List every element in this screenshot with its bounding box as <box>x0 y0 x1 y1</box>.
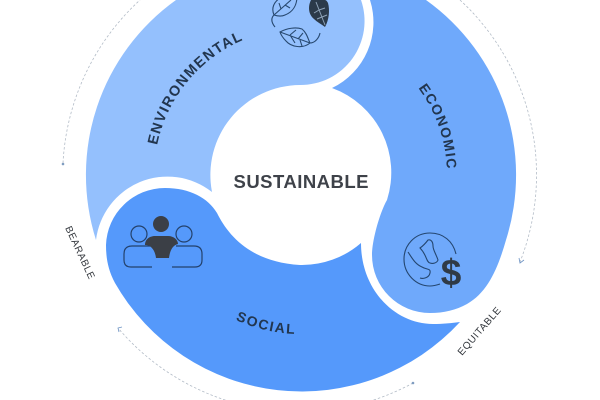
icon: people <box>124 216 202 267</box>
panel: economic segment <box>332 0 516 313</box>
dashed arc: bottom <box>118 327 414 400</box>
label: equitable: EQUITABLE <box>456 305 504 358</box>
heading: social: SOCIAL <box>236 312 294 334</box>
panel: environmental segment <box>86 0 365 240</box>
panel: social segment <box>106 188 460 391</box>
dashed arc: right <box>460 0 537 263</box>
heading: environmental: ENVIRONMENTAL <box>148 33 242 144</box>
label: bearable: BEARABLE <box>62 225 96 281</box>
dashed arc: left <box>62 0 140 165</box>
icon: globe with dollar <box>404 233 462 293</box>
icon: leaves <box>272 0 329 47</box>
dollar sign: $ <box>441 252 462 293</box>
title: sustainable: SUSTAINABLE <box>234 171 368 192</box>
heading: economic: ECONOMIC <box>418 83 456 168</box>
